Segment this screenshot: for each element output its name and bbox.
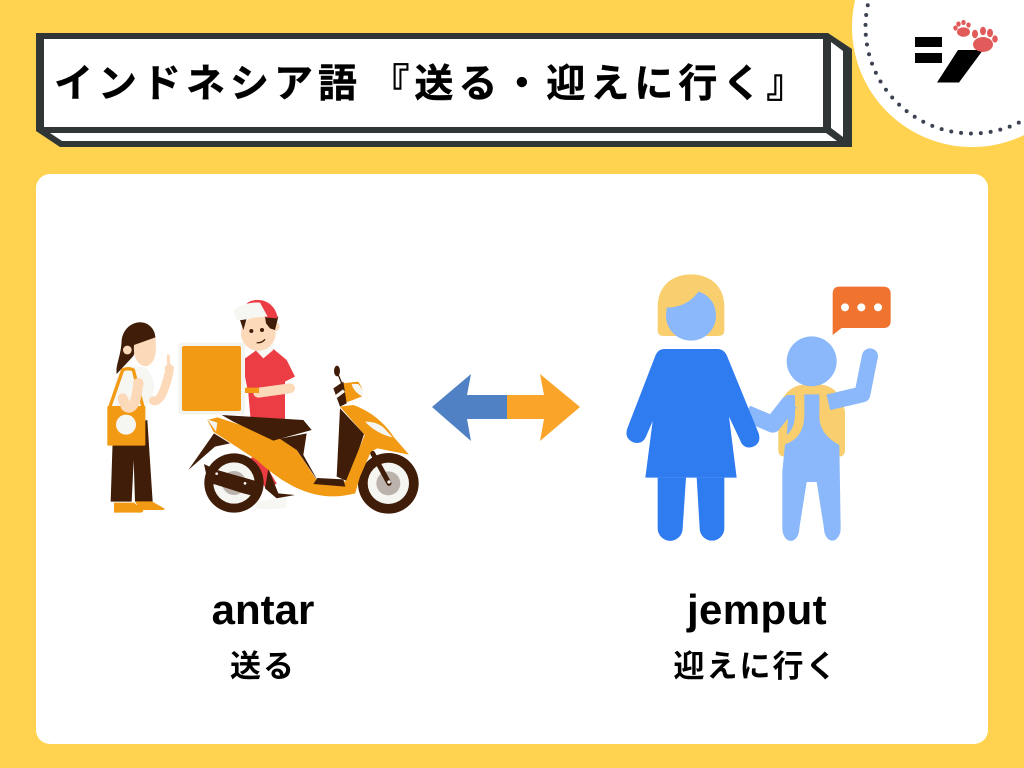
label: 迎えに行く: 迎えに行く — [674, 649, 838, 684]
panel: main white card — [36, 174, 988, 744]
illustration: delivery rider and customer with motorbike — [107, 300, 419, 514]
double-headed arrow — [432, 374, 580, 441]
label: antar: antar — [212, 586, 314, 633]
rider — [233, 300, 295, 509]
delivery box — [178, 342, 245, 415]
child — [747, 336, 878, 541]
mother — [626, 274, 759, 541]
title text: インドネシア語 『送る・迎えに行く』 — [54, 63, 810, 106]
illustration: parent and child with speech bubble — [626, 274, 891, 541]
label: jemput: jemput — [687, 586, 827, 633]
title banner — [36, 33, 852, 147]
speech bubble — [833, 287, 891, 335]
woman customer — [107, 322, 174, 513]
motorbike — [188, 366, 419, 514]
label: 送る: 送る — [230, 649, 296, 684]
